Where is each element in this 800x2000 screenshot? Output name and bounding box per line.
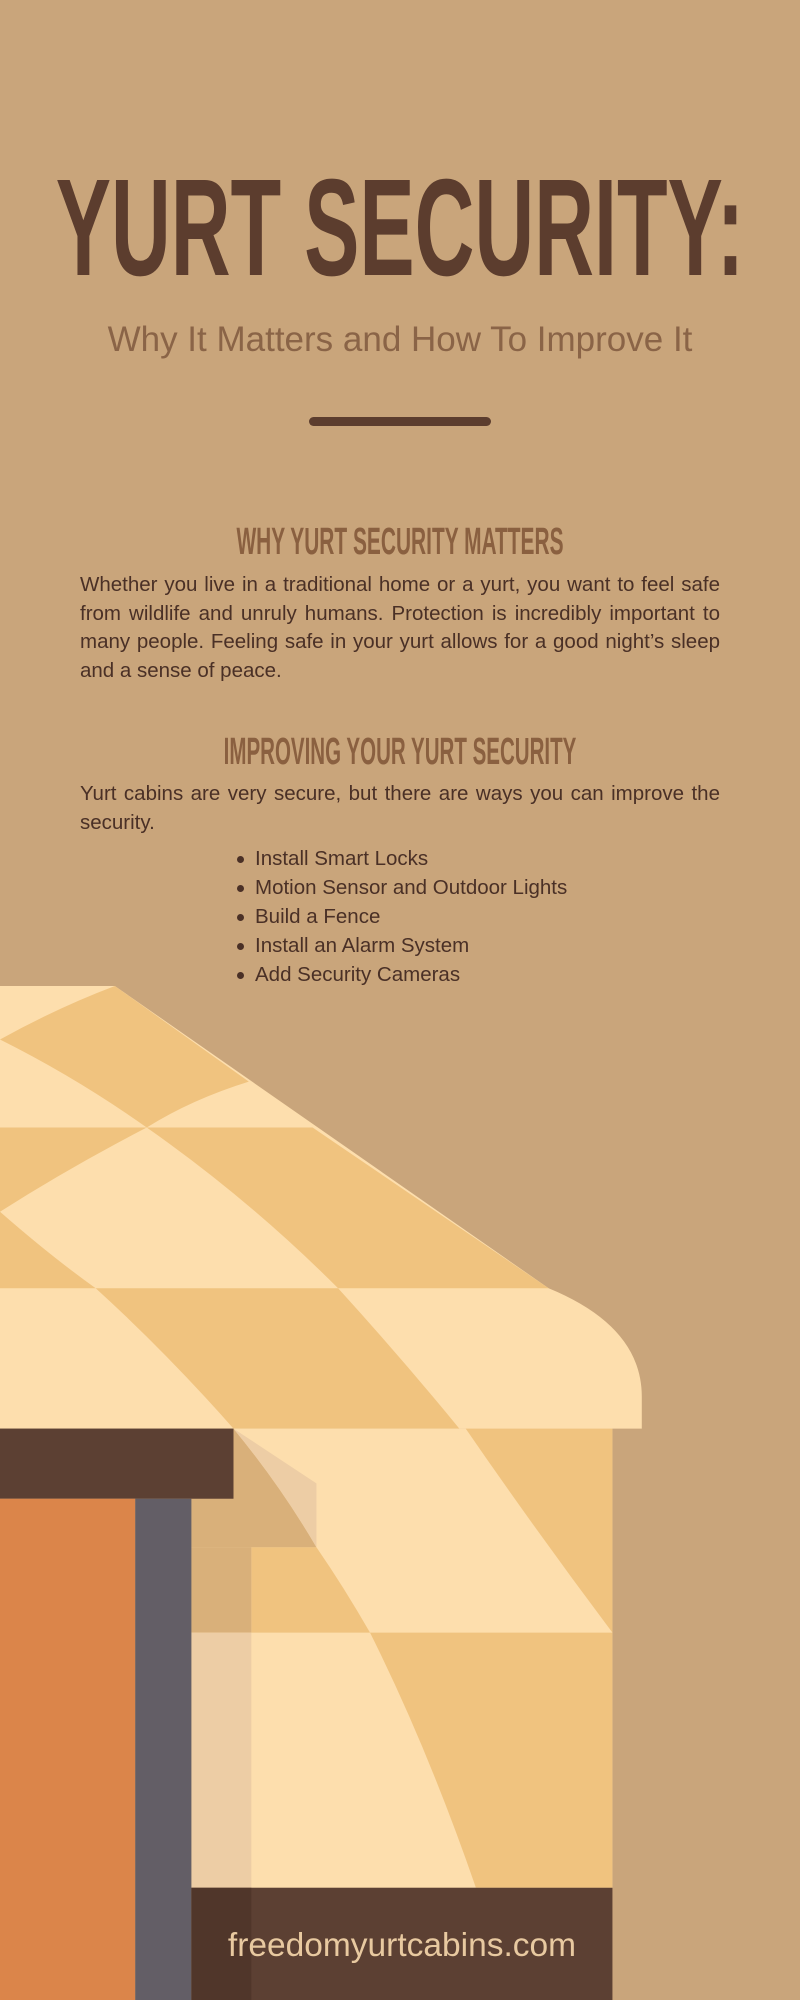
eave band (0, 1429, 233, 1499)
bullet list: Build a Fence (255, 905, 380, 928)
roof (0, 986, 642, 1429)
heading: improving: IMPROVING YOUR YURT SECURITY (224, 731, 576, 773)
footer url: freedomyurtcabins.com (228, 1927, 576, 1964)
footer band (191, 1888, 612, 2000)
divider line (309, 417, 491, 426)
paragraph: improving: Yurt cabins are very secure, but there are ways you can improve the security. (80, 782, 720, 834)
title: YURT SECURITY: (56, 151, 744, 305)
bullet list: Install Smart Locks (255, 847, 428, 870)
paragraph: why: Whether you live in a traditional home or a yurt, you want to feel safe from wildlife and unruly humans. Protection is incredibly important to many people. Feeling safe in your yurt allows for a good night’s sleep and a sense of peace. (80, 573, 720, 682)
door (0, 1499, 191, 2000)
bullet list: Install an Alarm System (255, 934, 469, 957)
bullet list (237, 847, 567, 986)
wall (191, 1429, 612, 1888)
subtitle: Why It Matters and How To Improve It (108, 320, 692, 359)
heading: why yurt security matters: WHY YURT SECURITY MATTERS (236, 521, 564, 563)
bullet list: Motion Sensor and Outdoor Lights (255, 876, 567, 899)
bullet list: Add Security Cameras (255, 963, 460, 986)
